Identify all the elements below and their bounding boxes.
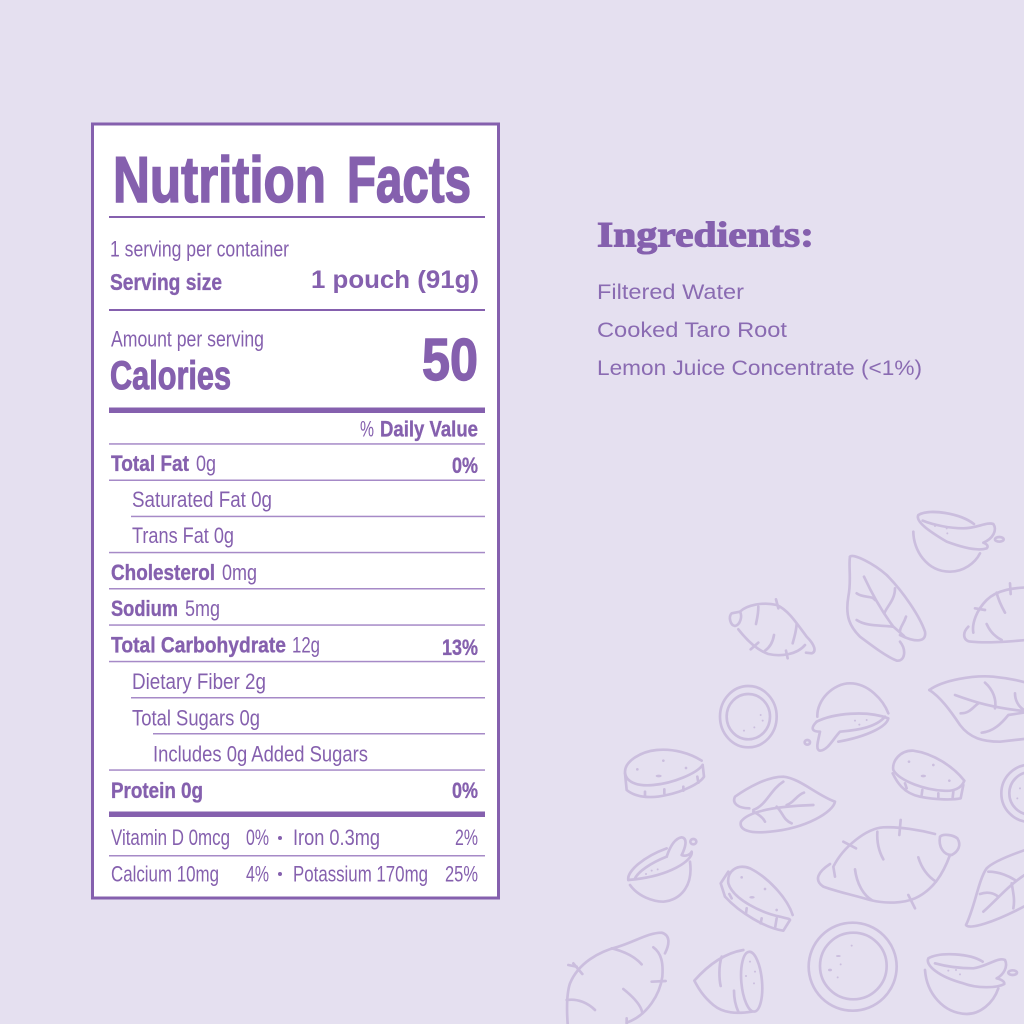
row: calcium and potassium [111, 862, 478, 886]
row: sodium: 5mg [185, 596, 220, 621]
icon: bowl top right [913, 512, 1004, 572]
ingredients list: Cooked Taro Root [597, 319, 787, 342]
row: total sugars: Total Sugars 0g [132, 706, 260, 730]
row: calcium and potassium: Calcium 10mg [111, 862, 219, 886]
row: protein: Protein 0g [111, 778, 203, 803]
icon: taro root bottom left [567, 933, 668, 1024]
row: calcium and potassium: 4% [246, 862, 269, 886]
row: cholesterol: Cholesterol [111, 560, 215, 585]
row: calcium and potassium: 25% [445, 862, 478, 886]
row: vitamin d and iron: Vitamin D 0mcg [111, 825, 230, 850]
icon: bowl lower right [925, 954, 1017, 1014]
icon: taro slice lower [721, 867, 793, 931]
row: saturated fat: Saturated Fat 0g [132, 487, 272, 512]
row: vitamin d and iron [111, 825, 478, 850]
row: total carbohydrate: 12g [292, 632, 320, 658]
row: vitamin d and iron: Iron 0.3mg [293, 825, 380, 850]
servings per container: 1 serving per container [110, 236, 289, 262]
row: total fat: Total Fat [111, 451, 190, 476]
row: cholesterol: 0mg [222, 560, 257, 585]
icon: leaf lower right [966, 848, 1024, 927]
row: trans fat: Trans Fat 0g [132, 523, 234, 548]
row: protein: 0% [452, 778, 478, 803]
ingredients heading: Ingredients: [597, 214, 814, 254]
icon: small taro slice circle [720, 686, 777, 747]
title: Nutrition [113, 143, 326, 216]
serving size [110, 266, 479, 295]
row: total carbohydrate: Total Carbohydrate [111, 632, 286, 658]
row: dietary fiber: Dietary Fiber 2g [132, 669, 266, 694]
serving size: 1 pouch (91g) [311, 266, 479, 294]
row: added sugars: Includes 0g Added Sugars [153, 742, 368, 766]
daily value header: % [360, 416, 374, 442]
calories [110, 327, 478, 398]
serving size: Serving size [110, 269, 222, 295]
icon: leaf middle [734, 777, 835, 832]
icon: small taro root [730, 599, 814, 658]
illustrations: taro, leaves and bowls [567, 512, 1024, 1024]
row: vitamin d and iron: 2% [455, 825, 478, 850]
ingredients list: Filtered Water [597, 281, 744, 304]
title: Facts [347, 143, 471, 216]
icon: taro slice right [893, 751, 964, 799]
row: calcium and potassium: Potassium 170mg [293, 862, 428, 886]
icon: small bowl left [628, 837, 696, 902]
panel: nutrition facts label [92, 124, 498, 898]
row: total fat: 0g [196, 451, 216, 476]
label border [92, 124, 498, 898]
icon: tipped bowl [805, 683, 888, 751]
row: sodium: Sodium [111, 596, 178, 621]
icon: large leaf at right edge [929, 676, 1024, 742]
icon: cut taro half [694, 950, 765, 1013]
icon: taro slice circle at right edge [1001, 765, 1024, 822]
amount per serving: Amount per serving [111, 326, 264, 352]
icon: large taro slice circle [809, 923, 897, 1011]
calories: Calories [110, 354, 231, 398]
icon: taro slice left [625, 750, 704, 797]
icon: large taro root [818, 820, 959, 908]
ingredients list [597, 281, 922, 380]
row: total fat: 0% [452, 453, 478, 478]
row: total fat [111, 451, 478, 478]
icon: taro root at right edge [964, 583, 1024, 642]
row: total carbohydrate [111, 632, 478, 660]
ingredients list: Lemon Juice Concentrate (<1%) [597, 357, 922, 380]
daily value header: Daily Value [380, 416, 478, 442]
row: protein [111, 778, 478, 803]
row: vitamin d and iron: 0% [246, 825, 269, 850]
icon: leaf upper [847, 556, 925, 661]
calories: 50 [422, 327, 478, 393]
row: total carbohydrate: 13% [442, 635, 478, 660]
